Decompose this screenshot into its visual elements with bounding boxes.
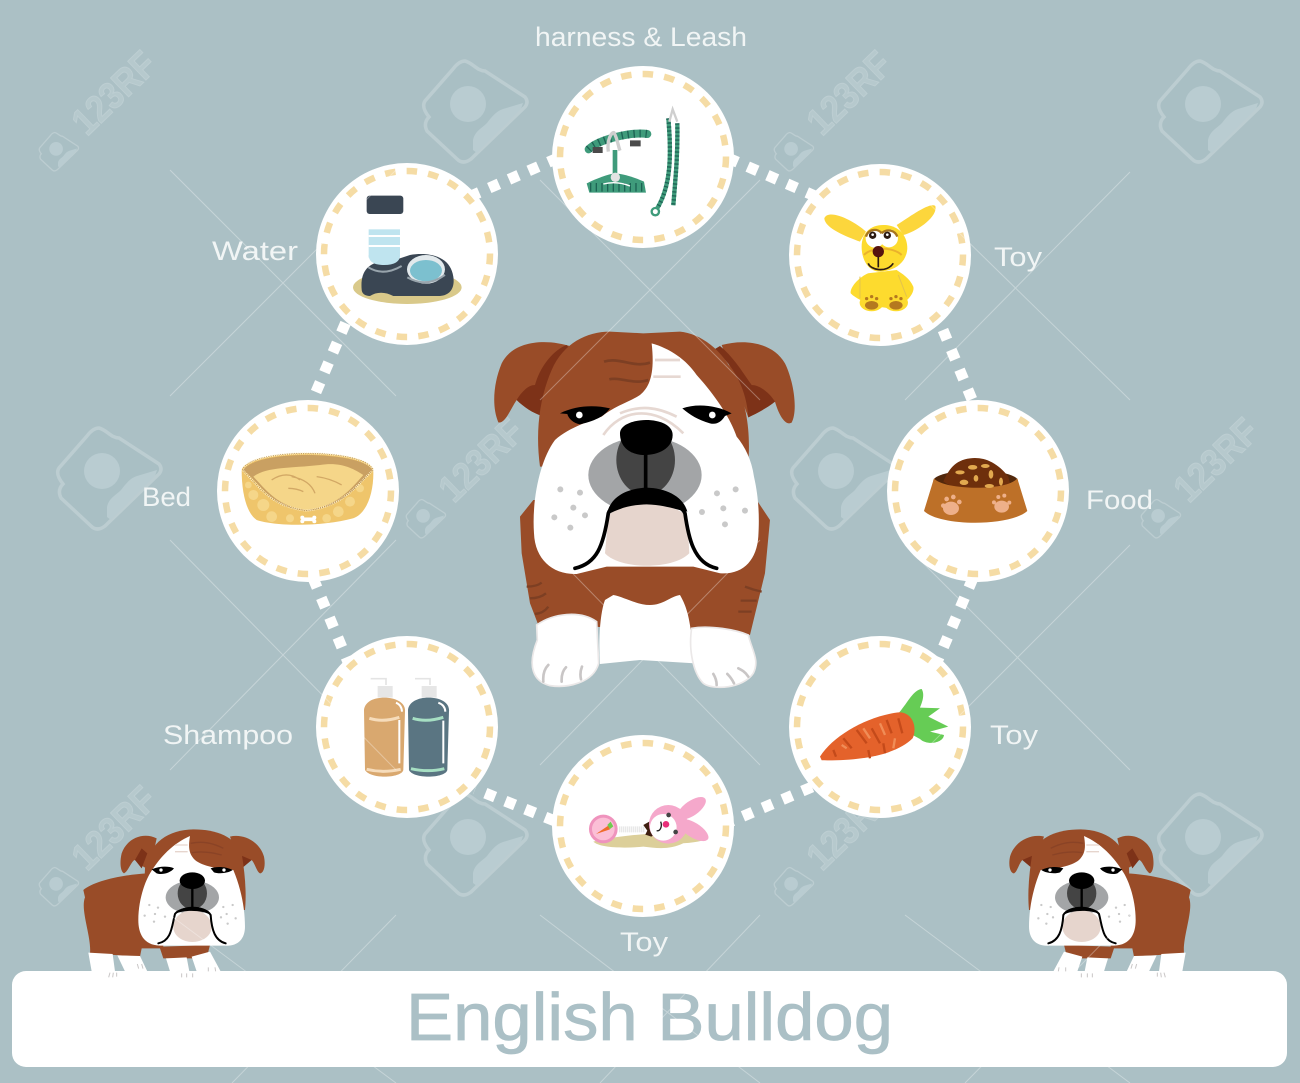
label: bed: Bed: [142, 482, 191, 512]
label: toy lower right: Toy: [990, 720, 1039, 750]
mouth: [575, 453, 717, 568]
body: [520, 500, 770, 635]
central bulldog: [494, 332, 795, 687]
icon: shampoo bottles: [364, 679, 449, 777]
label: food: Food: [1086, 485, 1153, 515]
item circle: carrot toy: [789, 636, 971, 818]
item circle: harness and leash: [552, 66, 734, 248]
chest: [599, 595, 693, 664]
dotted connector ring: [313, 158, 973, 821]
watermark logos: 123RF: [799, 779, 900, 878]
label: shampoo: Shampoo: [163, 720, 293, 750]
right small bulldog: [1009, 829, 1191, 977]
item circle: yellow rabbit toy: [789, 164, 971, 346]
left ear: [494, 342, 572, 422]
left eye: [560, 406, 610, 424]
icon: harness and leash: [587, 109, 677, 215]
chin: [605, 503, 689, 566]
watermark logos: 123RF: [64, 44, 165, 143]
nose: [620, 420, 673, 455]
item circle: food bowl: [887, 400, 1069, 582]
left paw: [532, 614, 599, 686]
watermark logos: [39, 44, 1267, 906]
item circle: shampoo bottles: [316, 636, 498, 818]
watermark logos: 123RF: [64, 779, 165, 878]
watermark logos: 123RF: [431, 411, 532, 510]
title panel: [12, 971, 1287, 1067]
label: toy bottom: Toy: [620, 927, 669, 957]
icon: water dispenser: [353, 196, 462, 304]
right eye: [682, 406, 732, 424]
forehead wrinkles: [603, 360, 683, 435]
icon: carrot toy: [820, 689, 948, 760]
toe marks: [543, 665, 748, 685]
muzzle centre: [616, 425, 675, 495]
label: water: Water: [212, 236, 298, 266]
white blaze and muzzle: [534, 343, 759, 574]
watermark logos: 123RF: [799, 44, 900, 143]
icon: pink rabbit toy: [589, 793, 712, 848]
item circle: rabbit and ball toy: [552, 735, 734, 917]
icon: yellow plush toy: [824, 205, 936, 311]
head: [538, 332, 749, 467]
label: harness & leash: harness & Leash: [535, 22, 747, 52]
icon: dog bed: [242, 453, 373, 525]
mouth top: [607, 488, 687, 515]
title: English Bulldog: [406, 980, 893, 1055]
label: toy top right: Toy: [994, 242, 1043, 272]
right paw: [691, 627, 756, 687]
watermark egg icons: [58, 61, 1262, 895]
watermark logos: 123RF: [1166, 411, 1267, 510]
whisker dots: [551, 486, 748, 531]
item circle: water dispenser: [316, 163, 498, 345]
icon: dog food bowl: [924, 458, 1027, 523]
faint watermark grid lines: [170, 170, 1130, 1083]
inner ear shading: [517, 345, 775, 417]
left small bulldog: [83, 829, 265, 977]
right ear: [722, 342, 795, 423]
muzzle shadow: [588, 437, 702, 513]
item circle: bed: [217, 400, 399, 582]
side fur marks: [527, 583, 762, 614]
